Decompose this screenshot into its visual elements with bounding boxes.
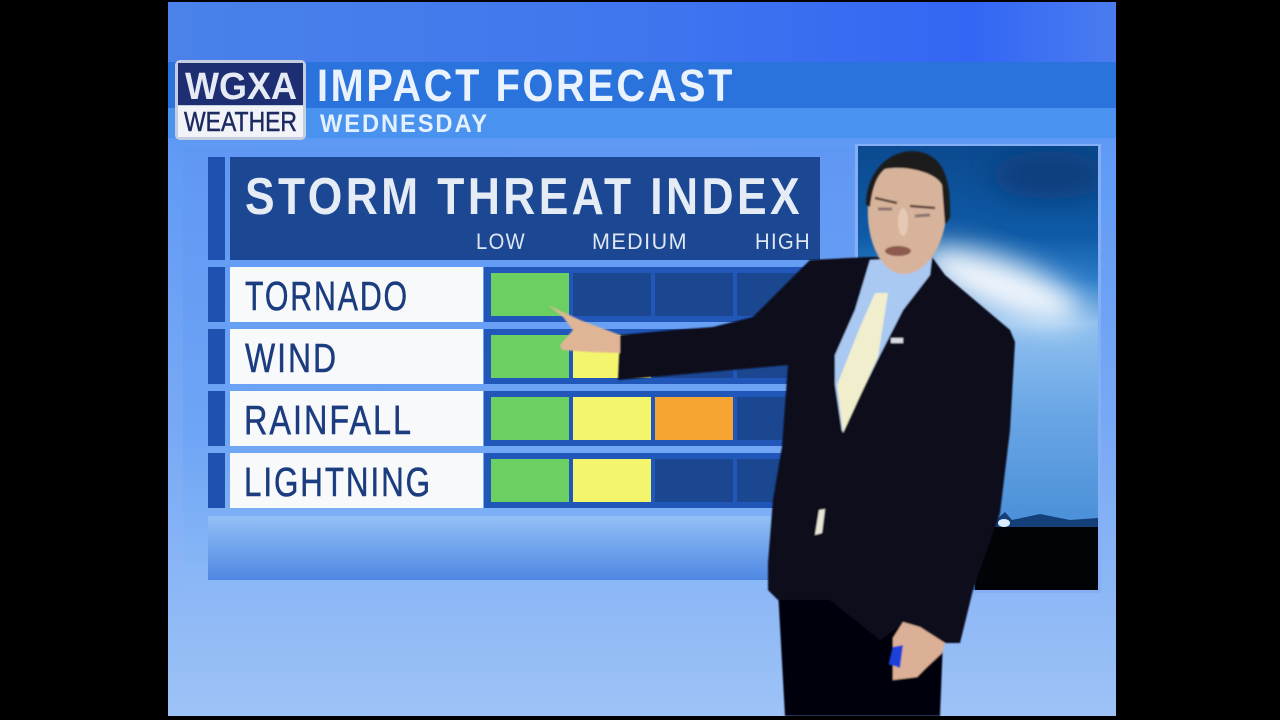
logo: WGXA Weather: WGXA [185,66,297,108]
row: lightning [208,453,820,508]
eye shadow [878,209,930,216]
table heading panel: MEDIUM [592,229,688,254]
jacket and arm [618,257,1015,643]
trousers [778,590,943,716]
logo: WGXA Weather [175,60,306,140]
row: wind: WIND [245,335,338,381]
pointing hand [548,305,620,353]
panel: content backdrop [183,148,853,590]
hair [866,151,950,225]
subtitle: WEDNESDAY [320,110,489,138]
table heading panel: STORM THREAT INDEX [245,168,803,226]
tie [837,293,888,433]
table heading panel: HIGH [755,229,811,254]
background screen [168,2,1116,716]
row: rainfall [208,391,820,446]
mouth [885,246,911,256]
pocket square [815,509,825,535]
footer band [208,516,820,580]
presenter [548,151,1015,716]
row: lightning: LIGHTNING [244,459,432,505]
logo: WGXA Weather: WEATHER [184,106,297,137]
row: tornado: TORNADO [245,273,409,319]
title: IMPACT FORECAST [317,60,735,111]
row: wind [208,329,820,384]
eyes [875,198,935,208]
nose highlight [898,208,908,236]
head [866,151,950,274]
clicker [889,645,903,668]
photo: storm sky [855,144,1110,593]
shirt [835,257,932,432]
table heading panel [208,157,820,260]
row: tornado [208,267,820,322]
header band [168,62,1116,138]
lower hand [893,622,945,680]
mic clip [891,338,903,343]
row: rainfall: RAINFALL [244,397,413,443]
table heading panel: LOW [476,229,526,254]
panel: storm threat index table [208,157,820,508]
